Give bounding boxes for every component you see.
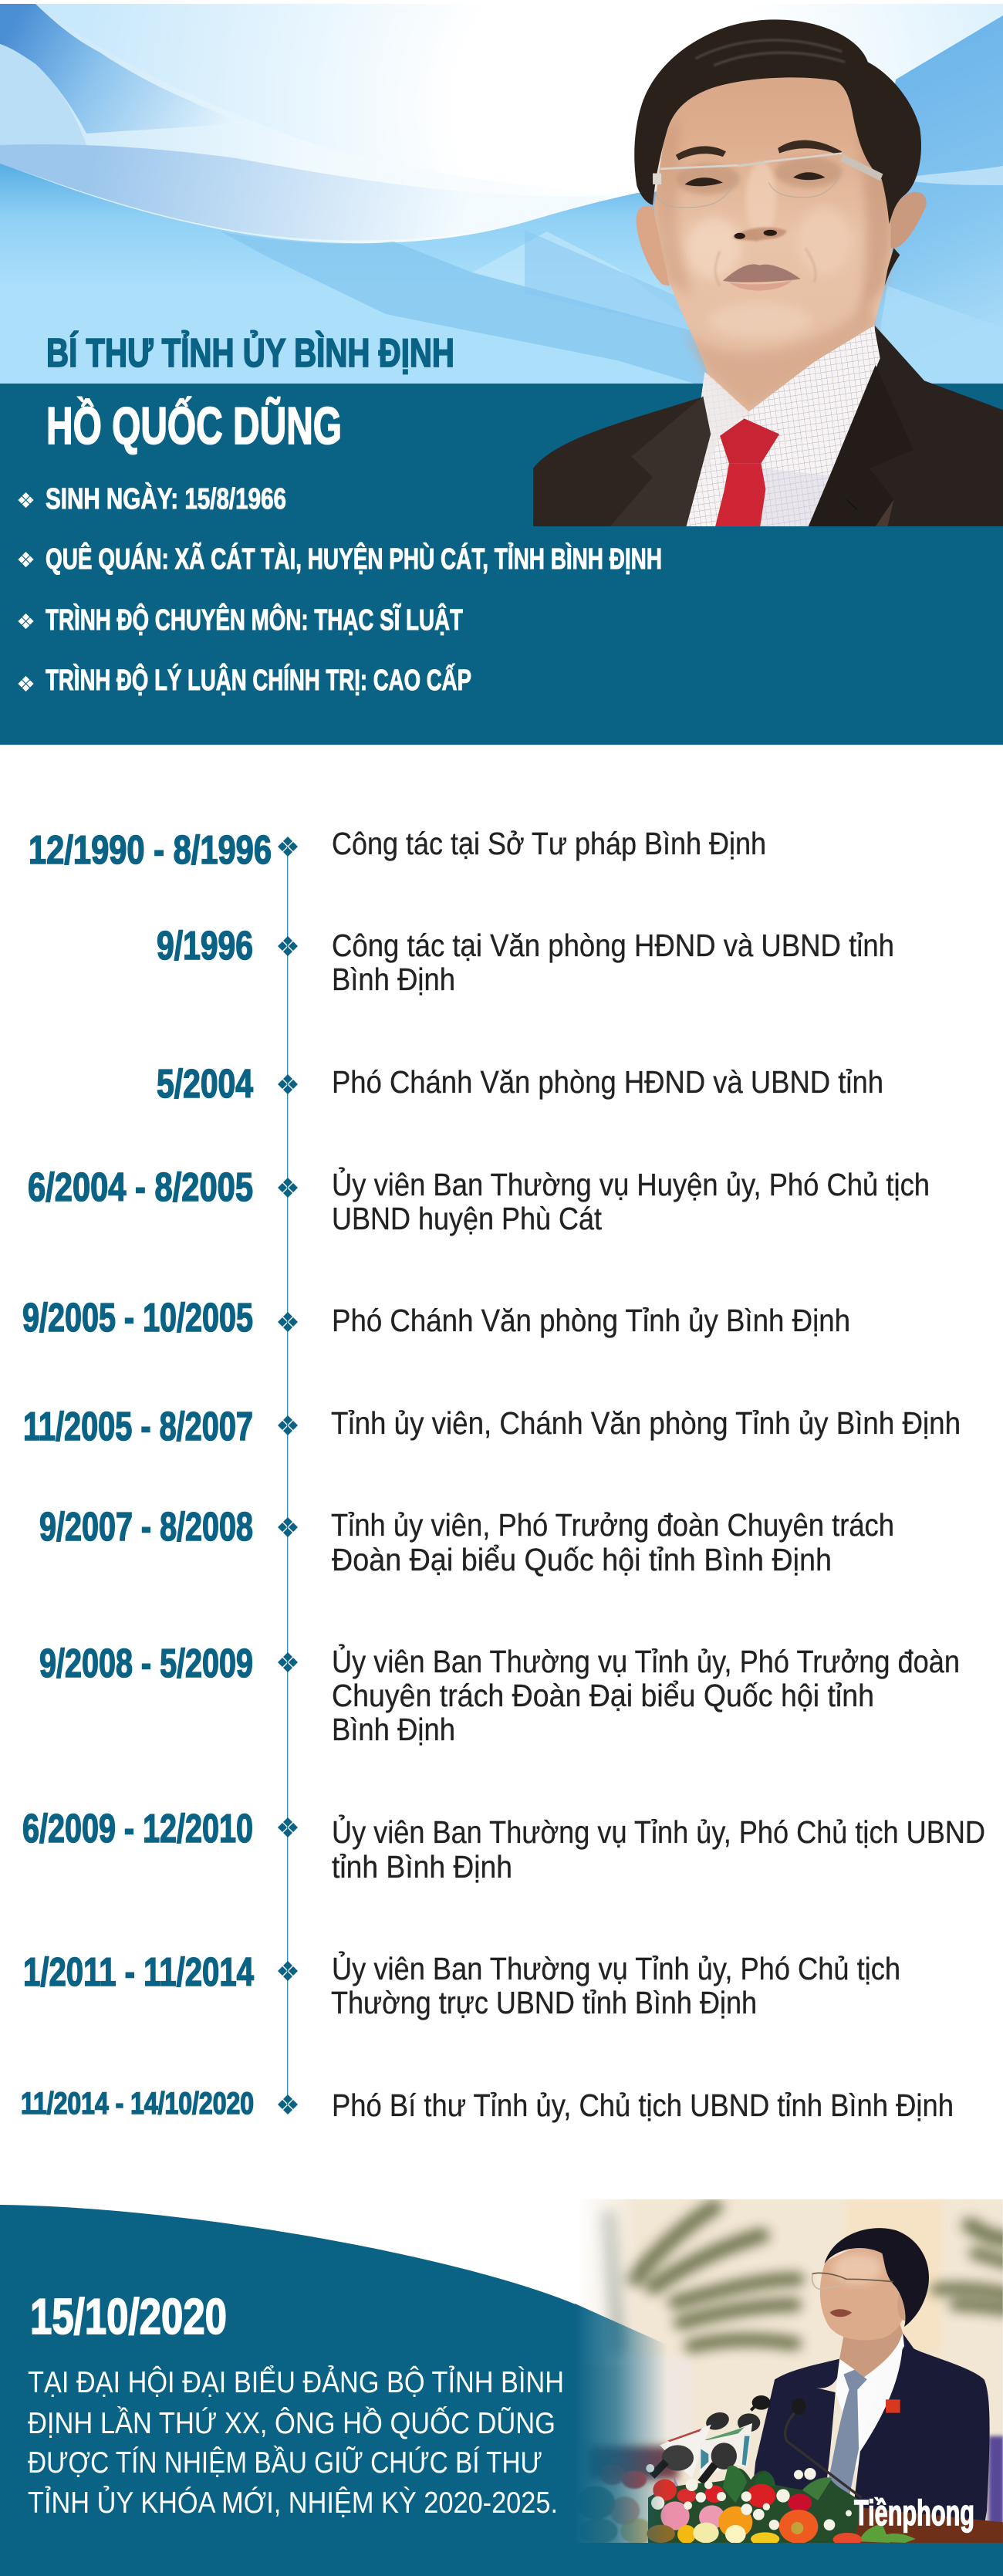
timeline entry 2 <box>157 924 894 997</box>
timeline entry 11: 11/2014 - 14/10/2020 <box>21 2087 254 2121</box>
timeline entry 1 <box>29 826 766 873</box>
timeline entry 5 <box>22 1296 850 1340</box>
timeline entry 2: Bình Định <box>332 962 455 997</box>
footer text block: TẠI ĐẠI HỘI ĐẠI BIỂU ĐẢNG BỘ TỈNH BÌNH <box>28 2365 564 2399</box>
timeline entry 8: 9/2008 - 5/2009 <box>39 1641 253 1686</box>
timeline entry 8: Chuyên trách Đoàn Đại biểu Quốc hội tỉnh <box>332 1678 874 1713</box>
info list <box>18 482 662 697</box>
timeline entry 4: Ủy viên Ban Thường vụ Huyện ủy, Phó Chủ tịch <box>332 1167 930 1202</box>
info: political theory: TRÌNH ĐỘ LÝ LUẬN CHÍNH TRỊ: CAO CẤP <box>46 662 471 697</box>
header background: blue waves <box>0 4 1003 384</box>
info: education: TRÌNH ĐỘ CHUYÊN MÔN: THẠC SĨ LUẬT <box>46 602 463 637</box>
timeline entry 9: 6/2009 - 12/2010 <box>22 1807 253 1851</box>
timeline entry 10 <box>23 1950 900 2020</box>
footer text block: ĐỊNH LẦN THỨ XX, ÔNG HỒ QUỐC DŨNG <box>28 2405 556 2440</box>
icon: bullet education <box>18 614 34 629</box>
photo: speaking at the congress <box>571 2199 1003 2546</box>
timeline entry 7: Tỉnh ủy viên, Phó Trưởng đoàn Chuyên trách <box>331 1507 894 1543</box>
timeline entry 4: UBND huyện Phù Cát <box>332 1201 603 1236</box>
timeline entry 6: 11/2005 - 8/2007 <box>23 1405 253 1449</box>
timeline entry 10: 1/2011 - 11/2014 <box>23 1950 254 1995</box>
timeline entry 10: Ủy viên Ban Thường vụ Tỉnh ủy, Phó Chủ tịch <box>332 1951 900 1986</box>
timeline entry 11 <box>21 2087 954 2123</box>
timeline entry 7: Đoàn Đại biểu Quốc hội tỉnh Bình Định <box>332 1542 832 1577</box>
timeline entry 7 <box>39 1505 894 1577</box>
timeline entry 8 <box>39 1641 960 1747</box>
timeline entry 1: 12/1990 - 8/1996 <box>29 828 272 873</box>
timeline entry 5: Phó Chánh Văn phòng Tỉnh ủy Bình Định <box>332 1303 850 1338</box>
timeline entry 3: Phó Chánh Văn phòng HĐND và UBND tỉnh <box>332 1064 883 1100</box>
header panel: teal band <box>0 384 1003 745</box>
timeline entry 1: Công tác tại Sở Tư pháp Bình Định <box>332 826 766 861</box>
timeline entry 6 <box>23 1405 961 1449</box>
timeline entry 8: Bình Định <box>332 1712 455 1747</box>
title: position: BÍ THƯ TỈNH ỦY BÌNH ĐỊNH <box>46 330 454 376</box>
footer date heading: 15/10/2020 <box>30 2288 227 2344</box>
timeline entry 4 <box>28 1165 930 1236</box>
timeline entry 4: 6/2004 - 8/2005 <box>28 1165 253 1210</box>
timeline entry 5: 9/2005 - 10/2005 <box>22 1296 253 1340</box>
footer text block <box>28 2365 564 2520</box>
timeline entry 2: 9/1996 <box>157 924 253 969</box>
info: hometown: QUÊ QUÁN: XÃ CÁT TÀI, HUYỆN PHÙ CÁT, TỈNH BÌNH ĐỊNH <box>46 542 662 576</box>
footer text block: TỈNH ỦY KHÓA MỚI, NHIỆM KỲ 2020-2025. <box>28 2486 558 2520</box>
portrait: Hồ Quốc Dũng <box>533 19 1003 526</box>
timeline entry 10: Thường trực UBND tỉnh Bình Định <box>331 1985 757 2020</box>
timeline entry 7: 9/2007 - 8/2008 <box>39 1505 253 1550</box>
timeline entry 3 <box>157 1062 883 1107</box>
timeline entry 2: Công tác tại Văn phòng HĐND và UBND tỉnh <box>332 928 894 963</box>
timeline entry 9: tỉnh Bình Định <box>332 1849 512 1885</box>
info: birth date: SINH NGÀY: 15/8/1966 <box>46 482 286 516</box>
icon: bullet birth date <box>18 492 34 508</box>
footer text block: ĐƯỢC TÍN NHIỆM BẦU GIỮ CHỨC BÍ THƯ <box>28 2446 542 2480</box>
icon: bullet hometown <box>18 552 34 567</box>
timeline entry 9 <box>22 1807 985 1885</box>
timeline entry 3: 5/2004 <box>157 1062 253 1107</box>
timeline <box>21 826 985 2123</box>
icon: bullet political theory <box>18 676 34 691</box>
title: name: HỒ QUỐC DŨNG <box>46 396 342 455</box>
footer panel: teal curved shape <box>0 2199 1003 2576</box>
